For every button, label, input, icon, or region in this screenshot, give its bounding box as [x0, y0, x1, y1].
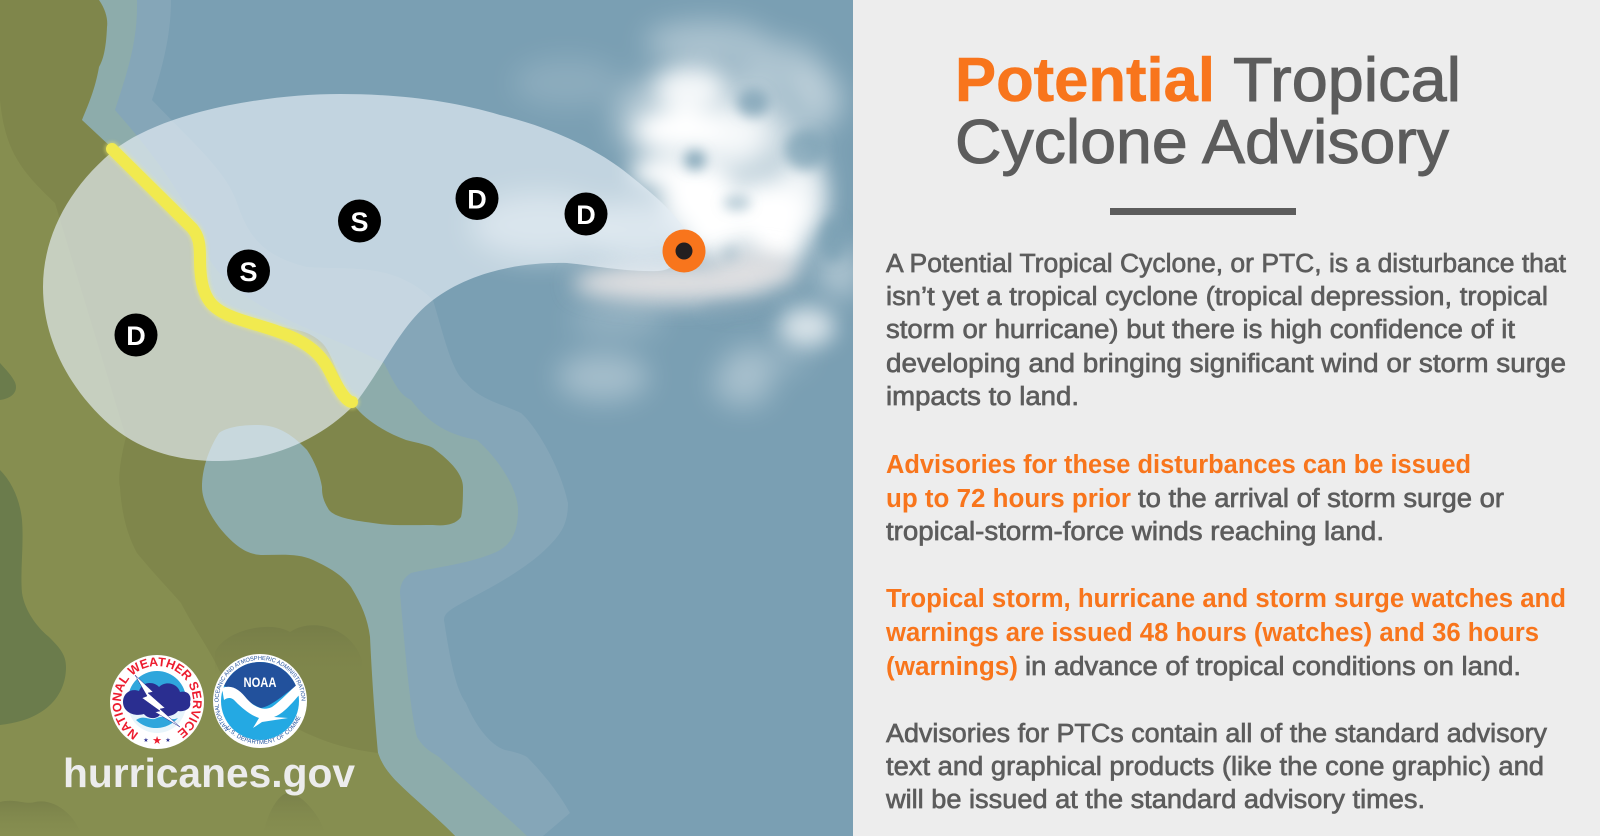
land [0, 0, 463, 836]
paragraph: definition: storm or hurricane) but there is high confidence of it [886, 316, 1515, 344]
paragraph: 72 hours: tropical-storm-force winds reaching land. [886, 518, 1384, 546]
panel: text [853, 0, 1600, 836]
paragraph: definition: impacts to land. [886, 383, 1079, 411]
logo: NOAA: U.S. DEPARTMENT OF COMMERCE [226, 716, 300, 744]
terrain hills [0, 626, 326, 810]
title divider [1110, 208, 1296, 215]
paragraph: definition: developing and bringing significant wind or storm surge [886, 350, 1566, 378]
marker: D at sea: D [467, 184, 487, 214]
paragraph: watches and warnings: warnings are issued 48 hours (watches) and 36 hours [885, 619, 1539, 647]
logo: National Weather Service: NATIONAL WEATHER SERVICE [112, 657, 202, 740]
logo: National Weather Service: ★ [152, 735, 162, 747]
marker: D at sea [456, 177, 498, 220]
paragraph: advisory products: Advisories for PTCs contain all of the standard advisory [886, 720, 1547, 748]
logo: National Weather Service: ★ [143, 737, 149, 744]
darker inland patch [0, 470, 66, 725]
small inland patch [0, 363, 16, 400]
paragraph: advisory products [885, 720, 1547, 814]
forecast cone [43, 94, 687, 461]
disturbance current position [662, 230, 706, 272]
paragraph: advisory products: will be issued at the standard advisory times. [885, 786, 1425, 814]
marker: D near storm [564, 192, 608, 236]
title: Potential [955, 46, 1215, 115]
panel: map [0, 0, 853, 836]
logo: NOAA: NOAA [244, 674, 276, 690]
paragraph: 72 hours: to the arrival of storm surge or [1138, 485, 1505, 513]
paragraph: 72 hours [886, 451, 1505, 546]
warning coastline [112, 149, 352, 402]
lighter land region [378, 753, 455, 836]
logo: National Weather Service: ★ [165, 737, 171, 744]
inner shallow water band [82, 0, 526, 836]
clouds [470, 22, 862, 407]
title: Tropical [1233, 46, 1461, 115]
paragraph: definition: A Potential Tropical Cyclone, or PTC, is a disturbance that [886, 250, 1566, 278]
outer shallow water band [115, 0, 570, 836]
marker: S at sea [338, 200, 381, 242]
website label: hurricanes.gov [63, 750, 355, 796]
marker: D near storm: D [576, 200, 596, 230]
paragraph: watches and warnings: in advance of tropical conditions on land. [1025, 653, 1521, 681]
marker: S near coast [227, 250, 270, 292]
ocean [152, 0, 853, 836]
paragraph: watches and warnings [885, 585, 1566, 681]
paragraph: 72 hours: up to 72 hours prior [886, 485, 1131, 513]
paragraph: 72 hours: Advisories for these disturbances can be issued [886, 451, 1471, 479]
paragraph: watches and warnings: Tropical storm, hurricane and storm surge watches and [886, 585, 1566, 613]
marker: S near coast: S [239, 257, 258, 287]
paragraph: definition [886, 250, 1566, 411]
panel background [853, 0, 1600, 836]
title: Cyclone Advisory [955, 108, 1449, 177]
paragraph: watches and warnings: (warnings) [886, 653, 1018, 681]
marker: D over land [114, 314, 158, 356]
paragraph: definition: isn’t yet a tropical cyclone (tropical depression, tropical [886, 283, 1548, 311]
marker: S at sea: S [350, 207, 369, 237]
paragraph: advisory products: text and graphical products (like the cone graphic) and [886, 753, 1544, 781]
title [955, 46, 1461, 177]
marker: D over land: D [126, 321, 146, 351]
logo: NOAA: NATIONAL OCEANIC AND ATMOSPHERIC ADMINISTRATION [214, 656, 306, 732]
